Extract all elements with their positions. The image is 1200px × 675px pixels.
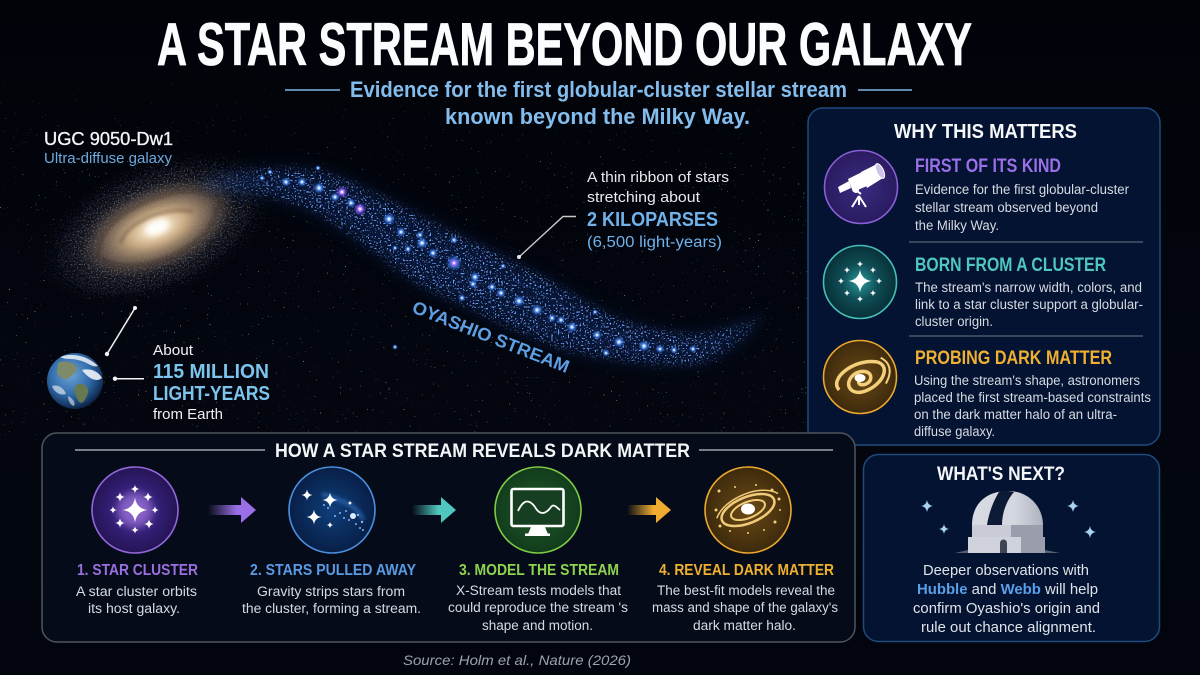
- step 2 icon: [289, 467, 375, 553]
- icon: galaxy gold: [824, 340, 896, 414]
- panel: why this matters: [808, 108, 1160, 445]
- callout: stream length: stretching about: [587, 190, 700, 206]
- item: born from a cluster: link to a star cluster support a globular-: [915, 297, 1143, 312]
- item: first of its kind: the Milky Way.: [915, 218, 999, 233]
- item: first of its kind: FIRST OF ITS KIND: [915, 156, 1061, 177]
- step 4 text: [652, 562, 838, 633]
- heading: how: HOW A STAR STREAM REVEALS DARK MATTER: [275, 441, 690, 462]
- panel: what's next: [864, 454, 1160, 642]
- heading: why this matters: WHY THIS MATTERS: [894, 121, 1077, 143]
- heading: what's next: WHAT'S NEXT?: [937, 464, 1065, 485]
- text: what's next: confirm Oyashio's origin and: [913, 601, 1100, 617]
- callout: distance: [153, 343, 270, 423]
- step 1 text: [76, 562, 198, 616]
- step 1 text: its host galaxy.: [88, 601, 180, 616]
- leader line: galaxy to Earth: [105, 306, 137, 356]
- text: what's next: [913, 563, 1100, 636]
- item: born from a cluster: BORN FROM A CLUSTER: [915, 255, 1106, 276]
- step 4 text: The best-fit models reveal the: [657, 583, 835, 598]
- step 3 text: [448, 562, 628, 633]
- step 2 text: 2. STARS PULLED AWAY: [250, 562, 416, 579]
- item: probing dark matter: on the dark matter halo of an ultra-: [914, 407, 1117, 422]
- leader line: Earth to distance: [113, 376, 144, 381]
- callout: distance: LIGHT-YEARS: [153, 383, 270, 405]
- step 3 icon: [495, 467, 581, 553]
- text: what's next: rule out chance alignment.: [921, 620, 1096, 636]
- subtitle: Evidence for the first globular-cluster stellar stream: [350, 77, 847, 102]
- callout: stream length: (6,500 light-years): [587, 234, 722, 251]
- step 4 text: mass and shape of the galaxy's: [652, 600, 838, 615]
- step 1 text: A star cluster orbits: [76, 584, 197, 599]
- item: first of its kind: Evidence for the first globular-cluster: [915, 182, 1129, 197]
- text: what's next: Hubble and Webb will help: [917, 582, 1098, 598]
- callout: stream length: A thin ribbon of stars: [587, 170, 729, 186]
- step 4 text: dark matter halo.: [693, 618, 796, 633]
- subtitle: known beyond the Milky Way.: [445, 104, 750, 129]
- step 2 text: Gravity strips stars from: [257, 584, 405, 599]
- item: born from a cluster: [915, 255, 1143, 329]
- item: first of its kind: [915, 156, 1129, 233]
- icon: telescope: [824, 150, 898, 224]
- callout: stream length: [587, 170, 729, 251]
- item: probing dark matter: [914, 348, 1151, 439]
- starfield: [0, 60, 820, 435]
- icons: sparkle stars: [921, 500, 1096, 538]
- galaxy label: Ultra-diffuse galaxy: [44, 151, 173, 167]
- subtitle: [285, 77, 912, 129]
- item: probing dark matter: placed the first stream-based constraints: [914, 390, 1151, 405]
- step 2 text: the cluster, forming a stream.: [242, 601, 421, 616]
- item: first of its kind: stellar stream observed beyond: [915, 200, 1098, 215]
- source: Source: Holm et al., Nature (2026): [403, 652, 631, 668]
- arrow 3: [627, 497, 671, 523]
- panel: how a star stream reveals dark matter: [42, 433, 855, 642]
- text: what's next: Deeper observations with: [923, 563, 1089, 579]
- callout: distance: About: [153, 343, 193, 359]
- step 4 text: 4. REVEAL DARK MATTER: [659, 562, 834, 579]
- item: probing dark matter: diffuse galaxy.: [914, 424, 995, 439]
- icon: Earth: [47, 353, 103, 409]
- Oyashio stream: [201, 162, 768, 372]
- leader line: stream width callout: [517, 216, 576, 259]
- item: born from a cluster: The stream's narrow width, colors, and: [915, 280, 1142, 295]
- arrow 2: [412, 497, 456, 523]
- galaxy label: UGC 9050-Dw1: [44, 129, 173, 149]
- step 3 text: could reproduce the stream 's: [448, 600, 628, 615]
- icon: star cluster teal: [824, 246, 896, 318]
- stream label: OYASHIO STREAM: [410, 297, 572, 377]
- step 1 text: 1. STAR CLUSTER: [77, 562, 198, 579]
- callout: distance: 115 MILLION: [153, 361, 269, 383]
- step 3 text: shape and motion.: [482, 618, 593, 633]
- step 2 text: [242, 562, 421, 616]
- galaxy: UGC 9050-Dw1: [43, 153, 270, 304]
- step 4 icon: [705, 467, 791, 553]
- icon: observatory: [955, 491, 1060, 553]
- galaxy label: [44, 129, 173, 167]
- step 3 text: X-Stream tests models that: [456, 583, 621, 598]
- step 1 icon: [92, 467, 178, 553]
- item: born from a cluster: cluster origin.: [915, 314, 993, 329]
- item: probing dark matter: PROBING DARK MATTER: [915, 348, 1112, 369]
- arrow 1: [208, 497, 256, 523]
- callout: stream length: 2 KILOPARSES: [587, 209, 718, 231]
- step 3 text: 3. MODEL THE STREAM: [459, 562, 619, 579]
- callout: distance: from Earth: [153, 407, 223, 423]
- item: probing dark matter: Using the stream's shape, astronomers: [914, 373, 1140, 388]
